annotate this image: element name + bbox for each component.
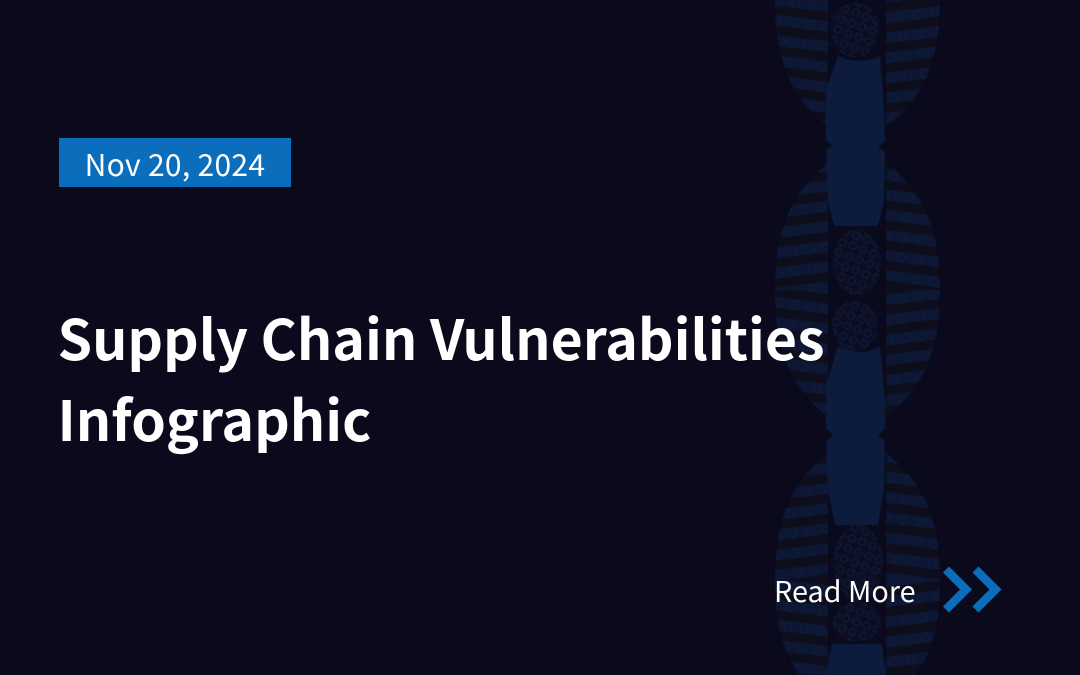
- date badge: [59, 138, 291, 187]
- background DNA helix graphic: [774, 0, 940, 675]
- dense central column: [826, 56, 886, 675]
- icon: double chevron arrow: [943, 566, 1002, 612]
- title: Supply Chain Vulnerabilities: [58, 296, 824, 376]
- read more label: Read More: [774, 570, 916, 611]
- title: [58, 296, 824, 457]
- title: Infographic: [58, 377, 371, 457]
- date badge: Nov 20, 2024: [85, 141, 265, 185]
- cone-shaped knots: [831, 2, 883, 642]
